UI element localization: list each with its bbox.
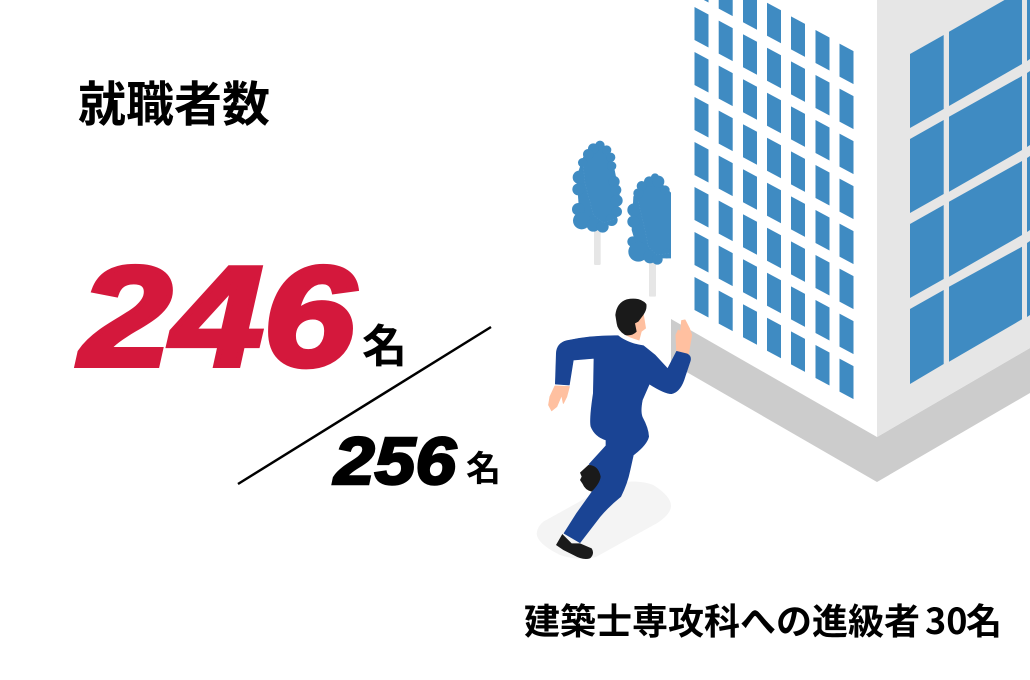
illustration: trees	[572, 141, 673, 297]
hand right	[676, 320, 692, 354]
fraction slash	[238, 327, 491, 484]
caption: 建築士専攻科への進級者	[524, 593, 920, 645]
unit 名: 名	[362, 321, 407, 372]
building right wall	[877, 0, 1030, 437]
number 256: 256	[332, 424, 457, 499]
face	[625, 312, 646, 341]
collar	[616, 333, 645, 346]
main figure: 246 employed	[77, 238, 407, 396]
suit	[555, 336, 691, 543]
ground shadow	[537, 482, 671, 559]
building base shadow	[671, 319, 1030, 482]
tree left	[572, 141, 623, 265]
title: 就職者数	[78, 79, 270, 132]
left wall windows	[694, 0, 854, 399]
front shoe	[556, 534, 593, 559]
right wall windows	[910, 0, 1030, 384]
caption: 名	[966, 593, 1002, 645]
rear shoe	[580, 465, 601, 492]
caption: 30	[925, 593, 967, 645]
number 246: 246	[77, 238, 356, 396]
tree right	[627, 173, 673, 297]
hand left	[549, 386, 569, 411]
hair	[615, 299, 647, 335]
total figure: 256	[332, 424, 501, 499]
illustration: running man	[537, 299, 692, 559]
illustration: building	[671, 0, 1030, 482]
unit 名 small: 名	[466, 450, 501, 489]
